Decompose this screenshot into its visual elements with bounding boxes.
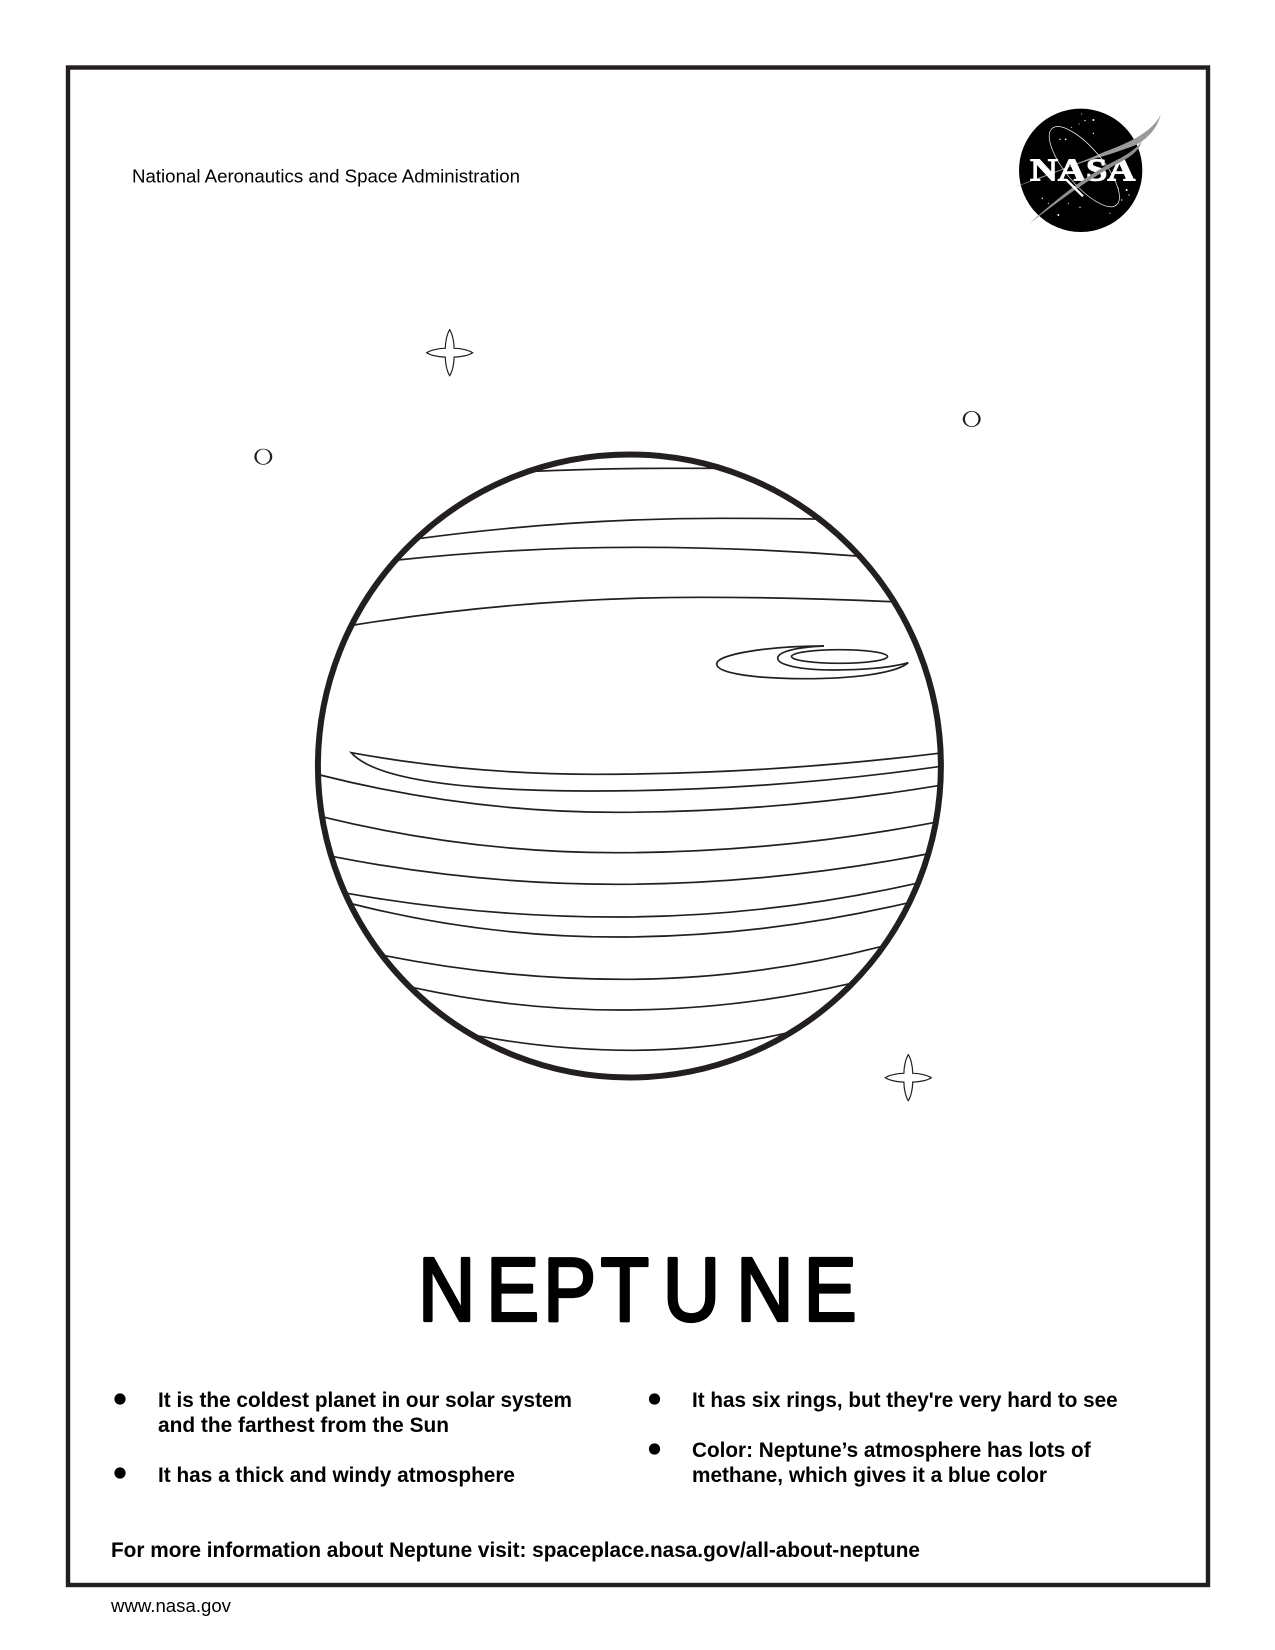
orbit	[1038, 117, 1131, 217]
fact: color: Color: Neptune’s atmosphere has lots of	[692, 1439, 1091, 1462]
fact: coldest planet: and the farthest from the Sun	[158, 1414, 449, 1437]
dark spot	[717, 646, 908, 679]
wordmark: NASA	[1030, 152, 1135, 188]
fact list left	[114, 1389, 572, 1487]
swoosh	[1012, 115, 1161, 188]
icon: star upper left	[427, 330, 473, 376]
lower cloud bands	[320, 775, 938, 1050]
upper cloud bands	[354, 468, 891, 625]
fact: coldest planet: It is the coldest planet in our solar system	[158, 1389, 572, 1412]
bullet	[649, 1443, 660, 1455]
bullet	[114, 1393, 126, 1405]
fact: windy atmosphere: It has a thick and windy atmosphere	[158, 1464, 515, 1487]
icon: star lower right	[885, 1055, 931, 1101]
website: www.nasa.gov	[110, 1595, 232, 1616]
title: NEPTUNE	[418, 1239, 857, 1340]
fact: color	[692, 1439, 1091, 1487]
long streak	[351, 753, 938, 791]
agency name: National Aeronautics and Space Administration	[132, 165, 520, 186]
planet: Neptune	[318, 454, 941, 1078]
bullet	[114, 1467, 126, 1479]
bullet	[649, 1393, 660, 1405]
icon: NASA logo	[1012, 109, 1161, 232]
more information line: For more information about Neptune visit: spaceplace.nasa.gov/all-about-neptune	[111, 1539, 920, 1562]
fact: six rings: It has six rings, but they're very hard to see	[692, 1389, 1118, 1412]
icon: small moon left	[254, 449, 272, 465]
fact list right	[649, 1389, 1118, 1487]
fact: color: methane, which gives it a blue color	[692, 1464, 1047, 1487]
icon: small moon right	[963, 411, 981, 427]
fact: coldest planet	[158, 1389, 572, 1437]
